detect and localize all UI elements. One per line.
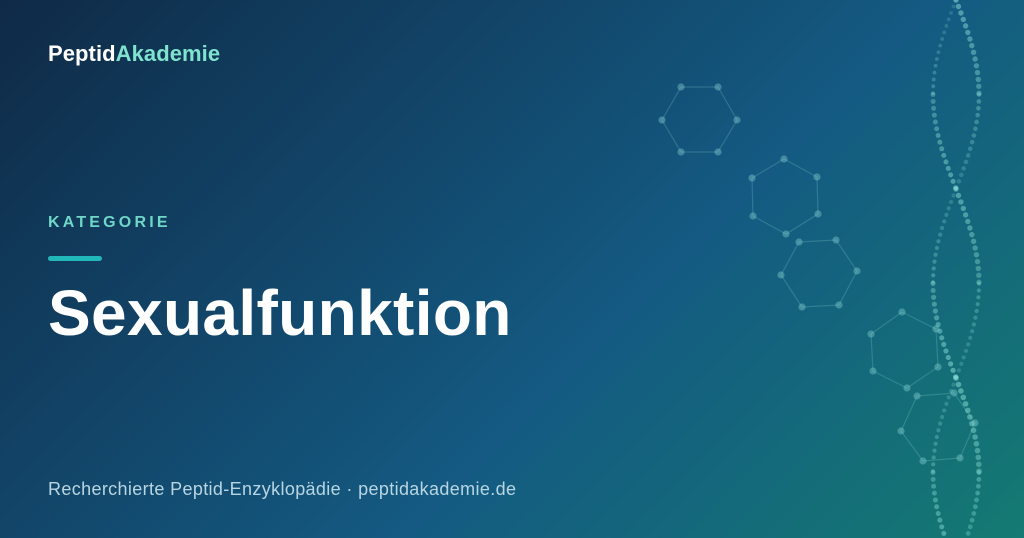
hexagon molecule 4 [867, 308, 942, 392]
DNA helix [933, 0, 979, 538]
title: Sexualfunktion [48, 277, 512, 349]
hexagon molecule 3 [777, 236, 861, 311]
hexagon molecule 2 [748, 155, 822, 238]
helix strand A [933, 0, 979, 538]
category label: KATEGORIE [48, 214, 171, 231]
logo: PeptidAkademie [48, 41, 220, 66]
hexagon molecule 5 [897, 389, 979, 465]
footer text: Recherchierte Peptid-Enzyklopädie · peptidakademie.de [48, 479, 516, 499]
hexagon molecule 1 [658, 83, 741, 156]
accent bar [48, 256, 102, 261]
helix strand B [933, 0, 979, 538]
